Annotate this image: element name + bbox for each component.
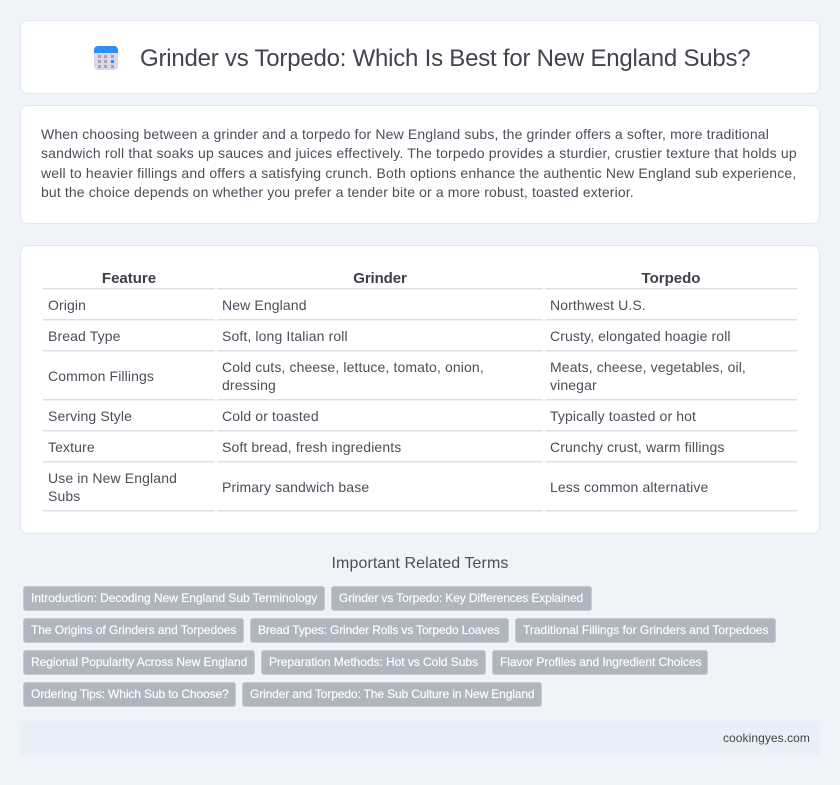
icon: calendar <box>94 46 118 70</box>
row: origin: Northwest U.S. <box>550 297 646 313</box>
tag: Grinder vs Torpedo: Key Differences Explained <box>339 591 583 605</box>
tag <box>23 618 244 643</box>
row: use in New England subs: Subs <box>48 488 80 504</box>
tag: Traditional Fillings for Grinders and Torpedoes <box>523 623 768 637</box>
related term tags <box>23 586 776 707</box>
tag: Regional Popularity Across New England <box>31 655 247 669</box>
row: texture: Texture <box>48 439 95 455</box>
footer bar <box>20 721 820 755</box>
row: texture: Soft bread, fresh ingredients <box>222 439 401 455</box>
row: bread type <box>48 328 731 344</box>
intro text: but the choice depends on whether you prefer a tender bite or a more robust, toasted exterior. <box>41 184 634 200</box>
tag <box>23 650 255 675</box>
header panel <box>20 20 820 94</box>
comparison table <box>43 270 797 512</box>
row: common fillings: Common Fillings <box>48 368 154 384</box>
row: origin: New England <box>222 297 307 313</box>
tag: Preparation Methods: Hot vs Cold Subs <box>269 655 478 669</box>
tag <box>515 618 776 643</box>
row: use in New England subs: Primary sandwich base <box>222 479 369 495</box>
tag <box>492 650 708 675</box>
row: bread type: Bread Type <box>48 328 121 344</box>
row: bread type: Crusty, elongated hoagie roll <box>550 328 731 344</box>
row: use in New England subs: Use in New England <box>48 470 177 486</box>
intro text <box>41 126 797 200</box>
related terms heading: Important Related Terms <box>332 555 508 572</box>
tag <box>250 618 509 643</box>
tag <box>261 650 486 675</box>
tag: The Origins of Grinders and Torpedoes <box>31 623 236 637</box>
row: origin: Origin <box>48 297 86 313</box>
row: serving style: Cold or toasted <box>222 408 319 424</box>
table header: Feature: Feature <box>102 270 156 287</box>
tag: Flavor Profiles and Ingredient Choices <box>500 655 702 669</box>
tag <box>23 682 236 707</box>
row: texture <box>48 439 725 455</box>
intro panel <box>20 105 820 224</box>
tag <box>23 586 325 611</box>
intro text: sandwich roll that soaks up sauces and juices effectively. The torpedo provides a sturdier, crustier texture that holds up <box>41 145 797 161</box>
row: common fillings: vinegar <box>550 377 597 393</box>
row: serving style: Typically toasted or hot <box>550 408 696 424</box>
row: origin <box>48 297 646 313</box>
tag: Bread Types: Grinder Rolls vs Torpedo Loaves <box>258 623 500 637</box>
row: use in New England subs <box>48 470 708 504</box>
tag: Ordering Tips: Which Sub to Choose? <box>31 687 229 701</box>
tag <box>331 586 592 611</box>
table header: Grinder: Grinder <box>353 270 407 287</box>
footer site name: cookingyes.com <box>723 731 810 745</box>
table panel <box>20 245 820 534</box>
row: common fillings <box>48 359 746 393</box>
row: serving style <box>48 408 696 424</box>
tag <box>242 682 542 707</box>
row: serving style: Serving Style <box>48 408 132 424</box>
intro text: When choosing between a grinder and a torpedo for New England subs, the grinder offers a softer, more traditional <box>41 126 769 142</box>
intro text: well to heavier fillings and offers a satisfying crunch. Both options enhance the authentic New England sub experience, <box>41 165 796 181</box>
row: common fillings: dressing <box>222 377 276 393</box>
row: common fillings: Meats, cheese, vegetables, oil, <box>550 359 746 375</box>
tag: Introduction: Decoding New England Sub Terminology <box>31 591 317 605</box>
tag: Grinder and Torpedo: The Sub Culture in New England <box>250 687 534 701</box>
table header: Torpedo: Torpedo <box>642 270 700 287</box>
row: bread type: Soft, long Italian roll <box>222 328 348 344</box>
row: texture: Crunchy crust, warm fillings <box>550 439 725 455</box>
row: use in New England subs: Less common alternative <box>550 479 708 495</box>
title: Grinder vs Torpedo: Which Is Best for New England Subs? <box>140 45 750 72</box>
row: common fillings: Cold cuts, cheese, lettuce, tomato, onion, <box>222 359 484 375</box>
